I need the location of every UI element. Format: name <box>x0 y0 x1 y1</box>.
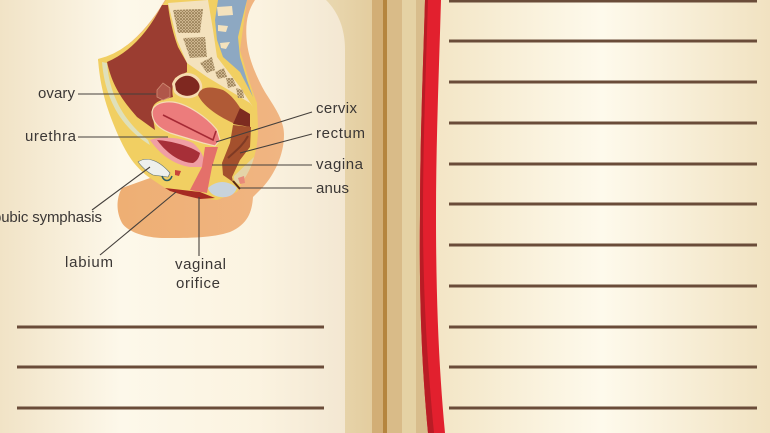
label: orifice: orifice <box>176 275 220 292</box>
ovary <box>157 83 170 100</box>
label: vaginal: vaginal <box>175 256 226 273</box>
sigmoid colon <box>198 88 248 125</box>
label: ovary: ovary <box>38 85 76 102</box>
leader lines <box>78 94 312 256</box>
spinal canal <box>215 0 253 97</box>
vagina <box>190 147 218 193</box>
label: rectum: rectum <box>316 125 365 142</box>
abdominal cavity <box>107 5 187 130</box>
label: anus: anus <box>316 180 349 197</box>
spine bone area <box>168 0 253 107</box>
pale abdominal wall stripe <box>102 62 150 145</box>
right page writing lines <box>449 1 757 408</box>
labium and vaginal opening <box>165 188 215 199</box>
red ribbon bookmark <box>420 0 445 433</box>
panel: right page <box>434 0 770 433</box>
left page writing lines <box>17 327 324 408</box>
label: labium: labium <box>65 254 113 271</box>
anatomy illustration: female pelvis cross-section <box>98 0 284 238</box>
body skin <box>98 0 284 238</box>
label: vagina: vagina <box>316 156 364 173</box>
label: urethra: urethra <box>25 128 77 145</box>
yellow fat layer <box>98 0 258 200</box>
vertebrae <box>173 9 244 98</box>
label: cervix: cervix <box>316 100 358 117</box>
anal muscle <box>208 182 237 197</box>
sacral cream blocks <box>217 6 233 49</box>
pubic bone <box>138 159 170 177</box>
book background <box>320 0 430 433</box>
bladder <box>150 138 205 167</box>
uterus <box>152 102 220 146</box>
rectum <box>222 125 251 182</box>
bowel loop <box>172 73 202 98</box>
panel: left page <box>0 0 345 433</box>
